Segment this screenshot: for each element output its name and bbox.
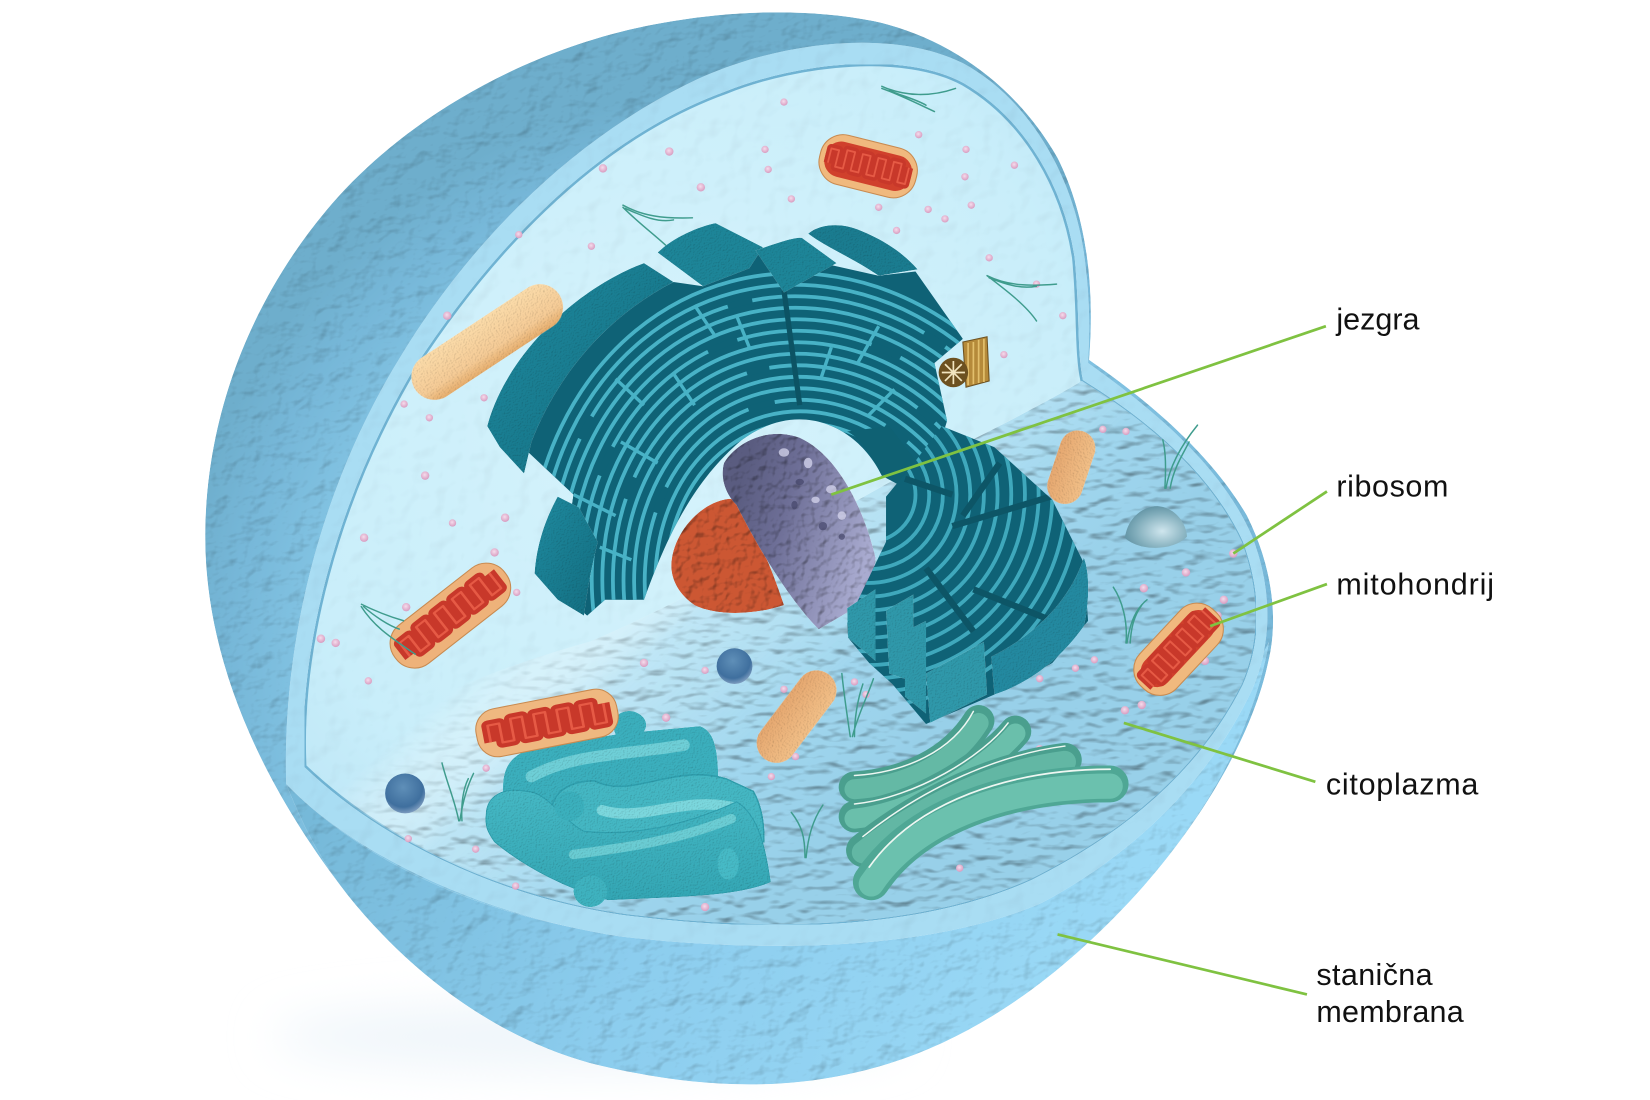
centriole <box>939 337 989 387</box>
ER top block 2 <box>756 238 837 293</box>
label: jezgra <box>831 302 1420 495</box>
cytoplasm floor <box>305 381 1256 924</box>
ER folded section <box>528 254 963 616</box>
front wall of shell <box>286 642 1269 1084</box>
endoplasmic reticulum arch <box>487 223 963 616</box>
label: jezgra: jezgra <box>1335 302 1420 336</box>
ER bump top <box>555 791 584 821</box>
label: mitohondrij: mitohondrij <box>1336 568 1495 602</box>
golgi stack faces <box>847 589 987 723</box>
ribosomes <box>317 98 1238 911</box>
golgi outer band <box>991 558 1088 695</box>
label: ribosom: ribosom <box>1336 470 1449 504</box>
capsule: orange rod centre <box>749 662 845 771</box>
ground shadow <box>274 1005 905 1068</box>
ER bump bottom <box>574 876 607 907</box>
middle ER sheet <box>551 775 764 842</box>
ER outer block left <box>487 263 673 474</box>
ER bump right <box>718 848 739 880</box>
label: mitohondrij <box>1210 568 1495 626</box>
nucleolus <box>671 499 784 613</box>
ER top block 1 <box>658 223 763 286</box>
mitochondrion bottom <box>472 686 622 760</box>
mitochondrion left <box>381 554 520 677</box>
golgi folded section <box>847 426 1088 724</box>
microtubule filaments <box>442 86 1198 858</box>
label: citoplazma <box>1124 723 1479 801</box>
blue vesicle centre <box>717 648 752 684</box>
label: ribosom <box>1233 470 1449 554</box>
golgi apparatus <box>847 426 1088 724</box>
mitochondrion right <box>1124 594 1233 705</box>
back wall of cell interior <box>305 65 1256 924</box>
green golgi sheets <box>854 711 1110 884</box>
middle sheet highlight <box>602 804 737 814</box>
capsule: orange rod right <box>1042 426 1100 509</box>
ER top block 3 <box>808 225 918 276</box>
rear sheet highlight <box>531 745 684 777</box>
filament over left mitochondrion <box>361 604 416 655</box>
front sheet highlight <box>574 819 731 854</box>
ER lower block <box>535 497 598 616</box>
label: stanična membrana: stanična <box>1316 958 1433 992</box>
animal cell illustration <box>205 12 1273 1084</box>
front ER sheet <box>486 790 770 900</box>
blue vesicle left <box>385 773 425 813</box>
label: stanična membrana <box>1058 934 1464 1029</box>
grey dome vesicle <box>1125 506 1187 548</box>
smooth endoplasmic reticulum <box>486 711 770 907</box>
rear ER sheet <box>503 711 718 810</box>
nucleus <box>723 434 876 629</box>
shell rim <box>286 43 1267 946</box>
ER inner underside <box>847 426 918 489</box>
label: citoplazma: citoplazma <box>1326 767 1479 801</box>
mitochondrion top <box>814 130 922 203</box>
label: stanična membrana: membrana <box>1316 995 1464 1029</box>
outer sphere shell <box>205 12 1273 1084</box>
capsule: orange rod upper left <box>402 275 572 409</box>
